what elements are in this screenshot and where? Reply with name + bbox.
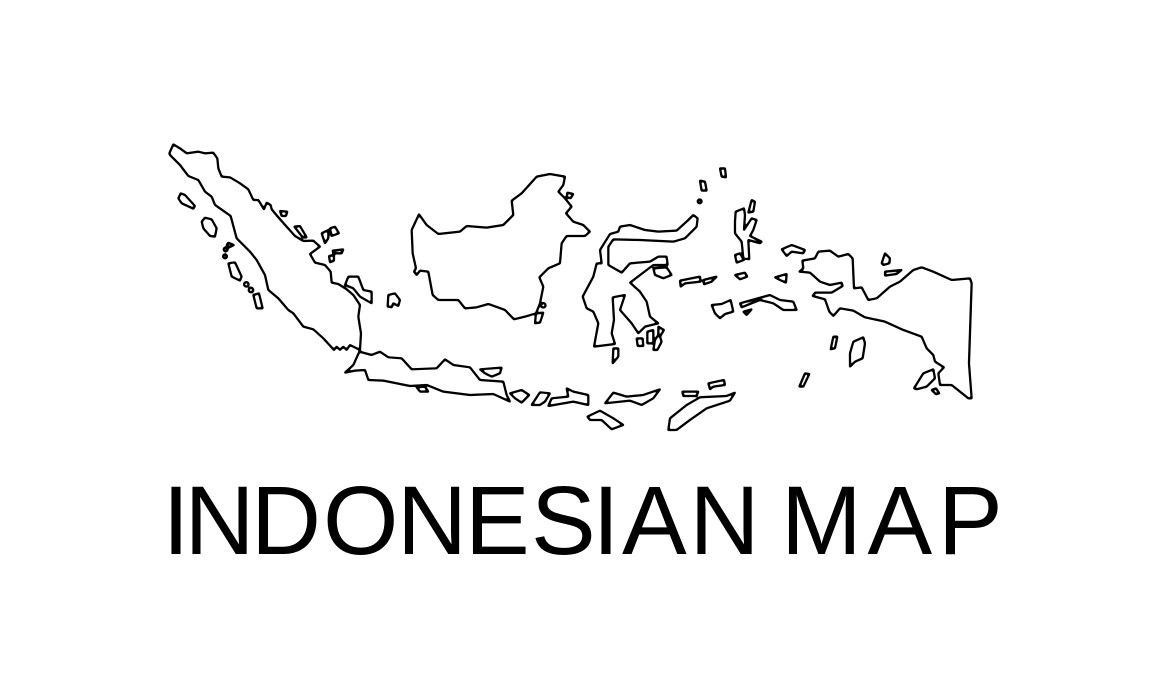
- title: INDONESIAN MAP: [162, 466, 1003, 575]
- region: Sulawesi, Maluku and Lesser Sunda east: [583, 168, 805, 430]
- map: Indonesia outline: [169, 144, 972, 430]
- region: Kalimantan, Java and Lesser Sunda west: [345, 174, 590, 406]
- region: Papua and nearby islands: [799, 251, 972, 398]
- region: Sumatra and western islands: [169, 144, 400, 350]
